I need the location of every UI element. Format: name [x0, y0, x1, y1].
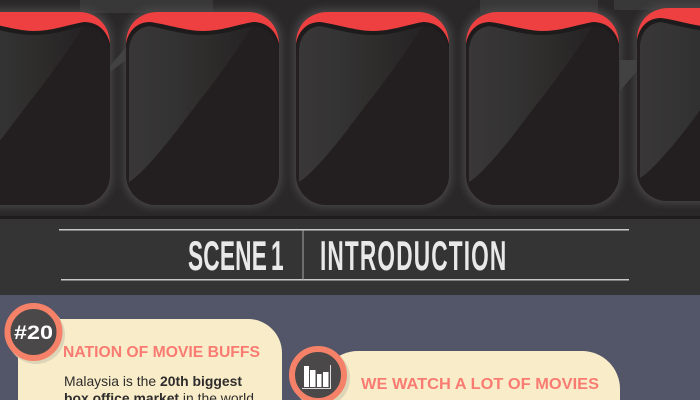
- gloss reflections between seats: [110, 47, 637, 91]
- seat 4: [466, 12, 619, 205]
- seat 2: [126, 12, 279, 205]
- scene number: 1: [271, 233, 284, 280]
- panel heading: WE WATCH A LOT OF MOVIES: [361, 376, 599, 393]
- seat glow halos: [0, 5, 700, 207]
- cinema seats backdrop: [0, 0, 700, 219]
- panel heading: NATION OF MOVIE BUFFS: [63, 344, 260, 361]
- panel: nation of movie buffs: [7, 306, 282, 400]
- badge: #20: #20: [14, 322, 53, 344]
- scene heading: [59, 229, 629, 280]
- scene number: SCENE: [188, 233, 267, 280]
- scene band: [0, 219, 700, 295]
- panel body text: Malaysia is the 20th biggest: [64, 373, 242, 389]
- icon: bar chart badge: [292, 349, 350, 400]
- panel body text: [64, 373, 254, 400]
- panel: we watch a lot of movies: [292, 349, 620, 400]
- seat 1: [0, 12, 110, 205]
- seat 5: [637, 8, 700, 201]
- lower background: [0, 295, 700, 400]
- seat 3: [296, 12, 449, 205]
- badge: #20: [7, 306, 65, 364]
- scene title: INTRODUCTION: [320, 233, 506, 280]
